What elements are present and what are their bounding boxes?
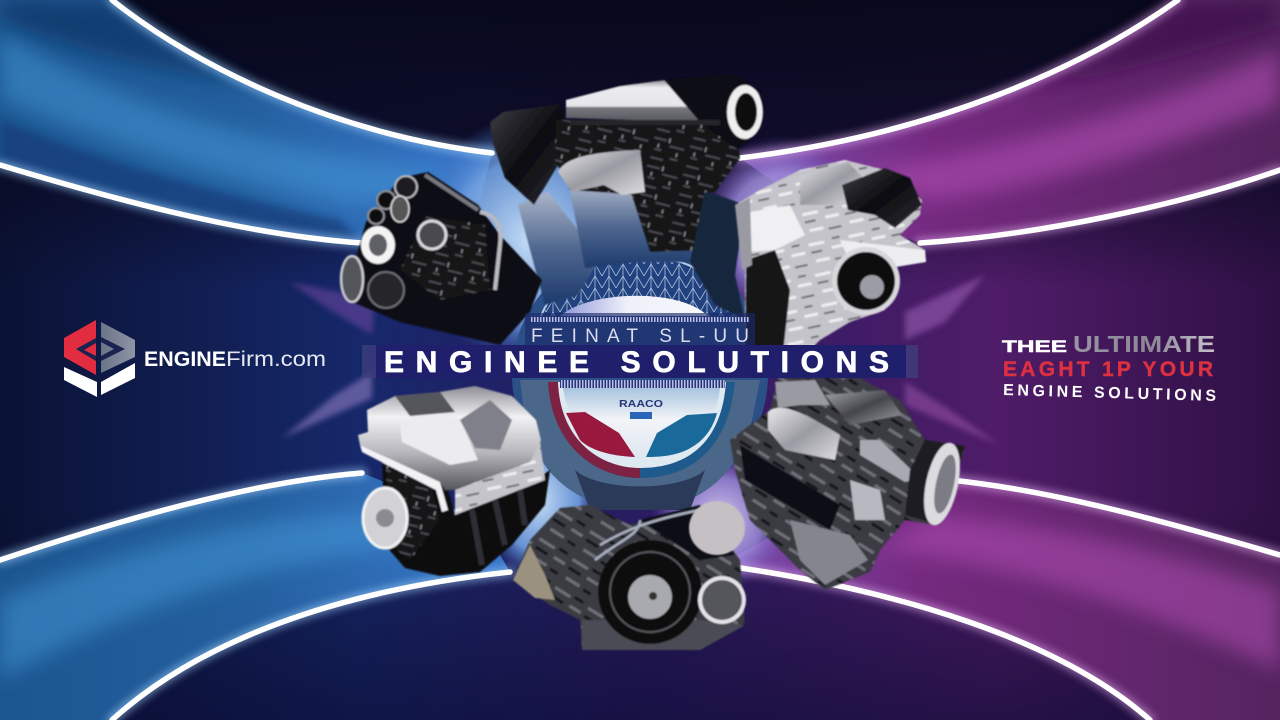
blue chip: [630, 412, 652, 419]
wheel: [905, 440, 966, 528]
engine: right: [735, 160, 926, 362]
logo wordmark: ENGINEFirm.com: [144, 348, 326, 371]
perforated disc: [689, 501, 745, 555]
purple burst streaks: [282, 275, 1000, 445]
lower bowl: [520, 380, 760, 510]
engine: bottom: [513, 505, 746, 650]
tagline line 2: EAGHT 1P YOUR: [1003, 358, 1213, 381]
banner: engine solutions: [362, 345, 918, 379]
tagline line 3: ENGINE SOLUTIONS: [1003, 382, 1217, 405]
small cylinder: [698, 576, 746, 624]
brand mark RAACO: RAACO: [619, 399, 663, 410]
band: upper left blue: [0, 0, 492, 243]
tagline: [1002, 331, 1217, 405]
title: ENGINEE SOLUTIONS: [384, 346, 889, 379]
central glow behind engines: [415, 115, 865, 590]
ornamental top arc: [541, 256, 742, 316]
band: upper right purple: [740, 0, 1280, 243]
subtitle strip: [525, 313, 755, 347]
main pulley: [598, 540, 702, 644]
tagline line 1: THEE ULTIIMATE: [1002, 331, 1215, 357]
band: lower right purple: [720, 480, 1280, 720]
engine: top: [490, 74, 763, 320]
band: lower left blue: [0, 473, 510, 720]
medallion: central dial: [512, 247, 768, 510]
red chevron: [566, 412, 635, 457]
hatched strip below banner: [560, 380, 725, 388]
engine: left: [340, 172, 542, 345]
logo: engine firm: [64, 320, 326, 397]
logo icon: [64, 320, 135, 397]
blue chevron: [646, 413, 717, 457]
engine: lower right: [689, 378, 966, 590]
pulley: [832, 247, 900, 315]
subtitle: FEINAT SL-UU: [531, 326, 749, 347]
engine: lower left: [358, 386, 550, 576]
